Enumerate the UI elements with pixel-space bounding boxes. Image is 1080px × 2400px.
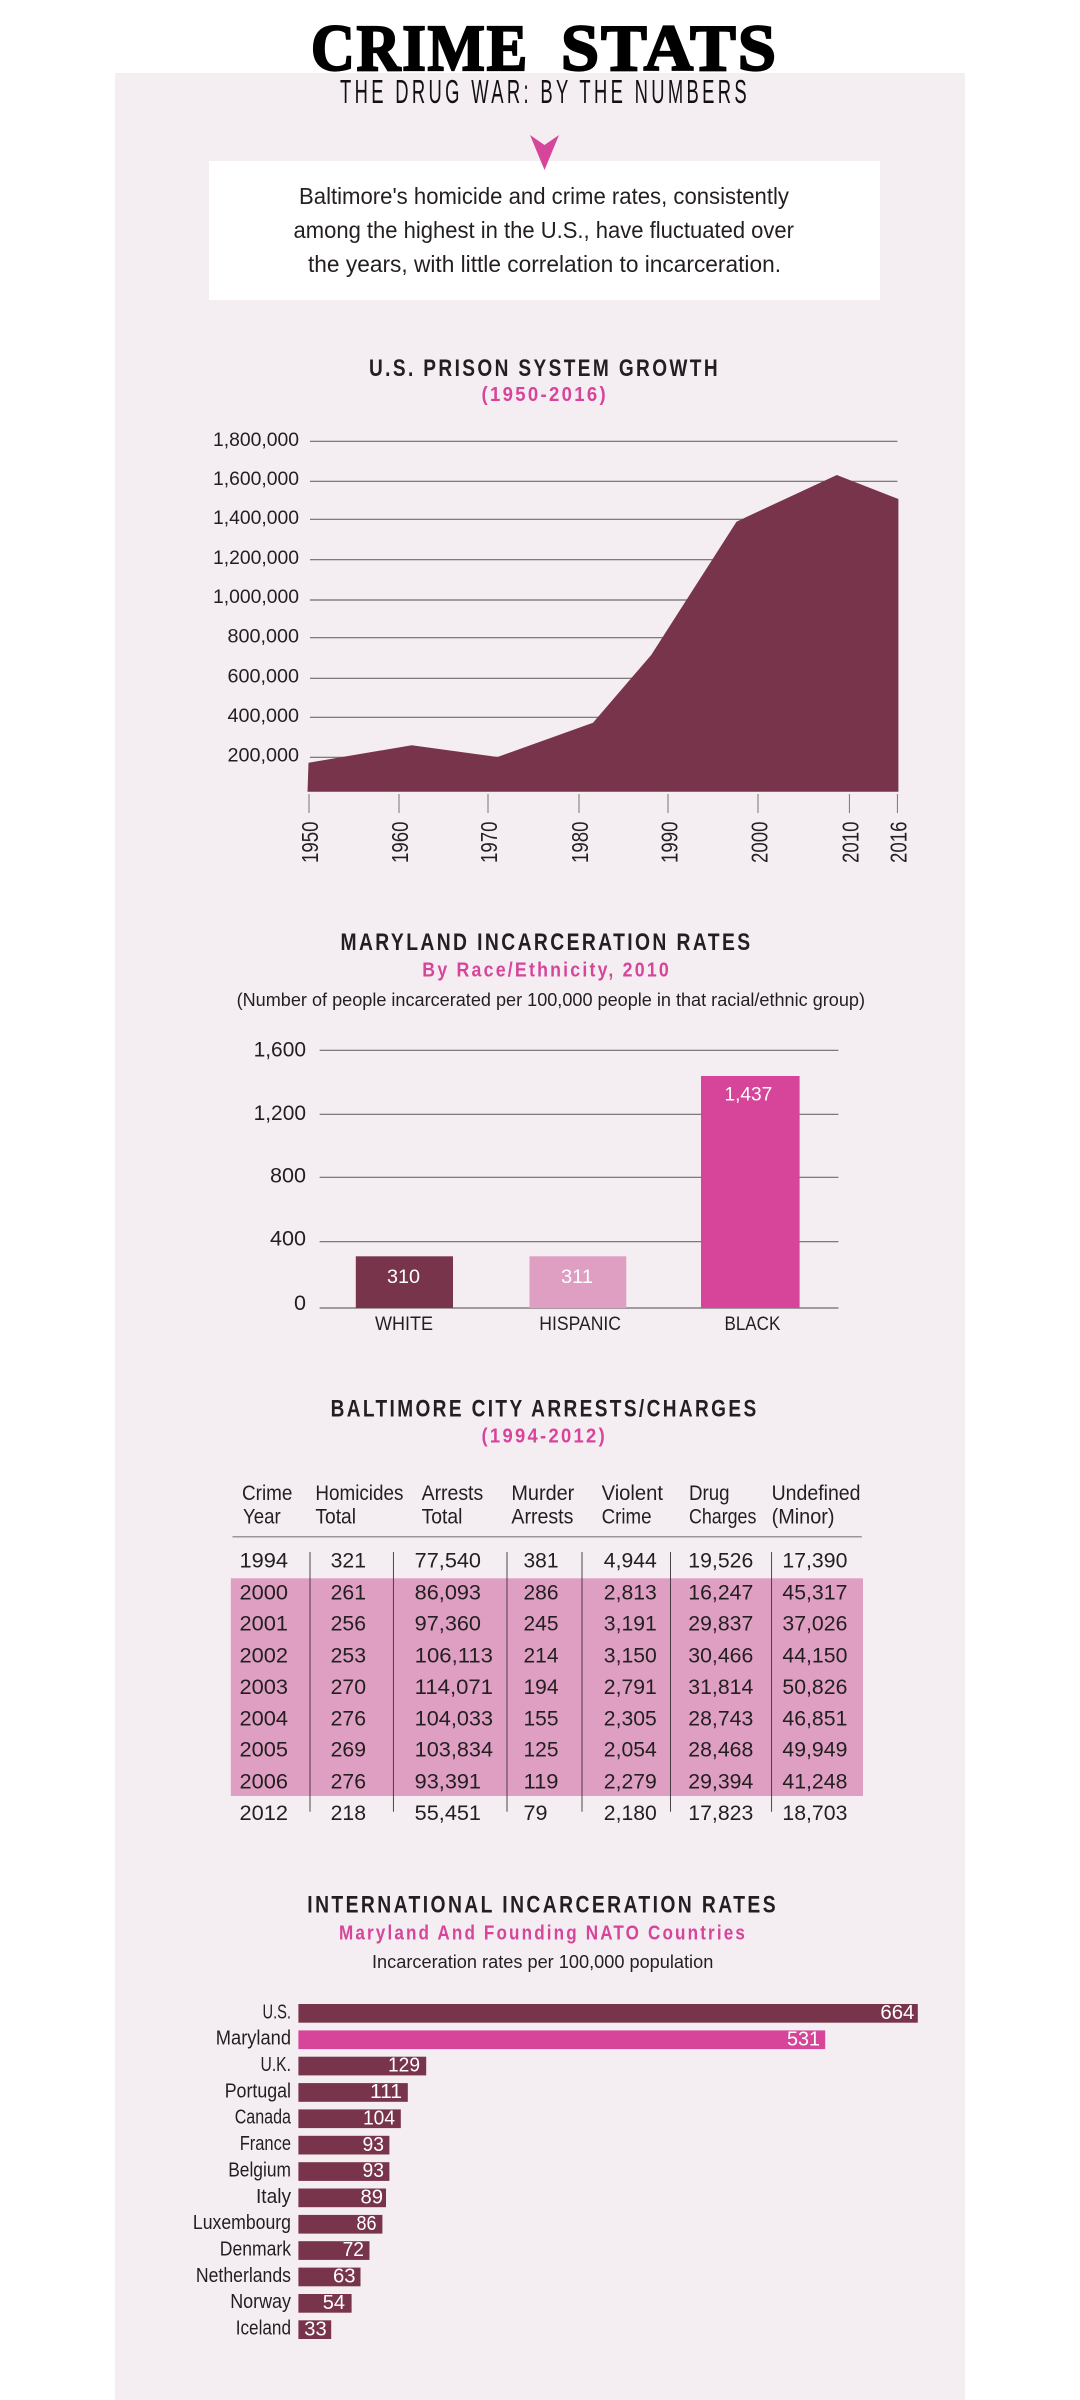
area chart: 600,000 bbox=[228, 667, 299, 688]
horizontal bar chart: 111 bbox=[370, 2080, 402, 2103]
table: 119 bbox=[524, 1769, 558, 1793]
title bbox=[311, 12, 778, 85]
horizontal bar chart: 129 bbox=[388, 2054, 420, 2077]
table: 2,180 bbox=[604, 1801, 657, 1825]
subtitle: THE DRUG WAR: BY THE NUMBERS bbox=[340, 73, 750, 110]
bar chart bbox=[254, 1038, 838, 1335]
table: 28,468 bbox=[688, 1738, 753, 1762]
table: 30,466 bbox=[688, 1644, 753, 1668]
area chart: 1,200,000 bbox=[213, 548, 299, 569]
area chart: 1,000,000 bbox=[213, 587, 299, 608]
table: 125 bbox=[524, 1738, 559, 1762]
table: 253 bbox=[331, 1644, 366, 1668]
horizontal bar chart: Belgium bbox=[228, 2159, 291, 2181]
horizontal bar chart: 72 bbox=[343, 2238, 364, 2261]
title: STATS bbox=[561, 12, 778, 85]
subheading: By Race/Ethnicity, 2010 bbox=[422, 960, 671, 982]
table: 28,743 bbox=[688, 1707, 753, 1731]
horizontal bar chart: 531 bbox=[787, 2027, 820, 2050]
title: CRIME bbox=[311, 12, 529, 85]
note: Incarceration rates per 100,000 population bbox=[372, 1951, 713, 1972]
table: 194 bbox=[524, 1675, 559, 1699]
table: Total bbox=[422, 1505, 462, 1528]
table: 2000 bbox=[240, 1580, 288, 1604]
table: Arrests bbox=[511, 1505, 573, 1528]
subheading: (1994-2012) bbox=[482, 1426, 607, 1448]
table: 3,191 bbox=[604, 1612, 657, 1636]
horizontal bar chart: France bbox=[240, 2133, 291, 2155]
table: 29,394 bbox=[688, 1769, 753, 1793]
table: Crime bbox=[242, 1482, 292, 1505]
table: Crime bbox=[602, 1505, 652, 1528]
note: (Number of people incarcerated per 100,000 people in that racial/ethnic group) bbox=[237, 989, 865, 1010]
table: 103,834 bbox=[415, 1738, 493, 1762]
table: 321 bbox=[331, 1549, 366, 1573]
horizontal bar chart: 63 bbox=[333, 2265, 356, 2288]
table: 4,944 bbox=[604, 1549, 657, 1573]
table: Undefined bbox=[772, 1482, 860, 1505]
table: 276 bbox=[331, 1769, 366, 1793]
area chart: 1980 bbox=[567, 822, 593, 863]
horizontal bar chart: Portugal bbox=[225, 2080, 291, 2102]
table: 155 bbox=[524, 1707, 559, 1731]
table: 55,451 bbox=[415, 1801, 481, 1825]
horizontal bar chart: 664 bbox=[880, 2001, 914, 2024]
table: 2,054 bbox=[604, 1738, 657, 1762]
horizontal bar chart: 54 bbox=[323, 2291, 345, 2314]
table: 214 bbox=[524, 1644, 559, 1668]
horizontal bar chart: Norway bbox=[230, 2291, 291, 2313]
bar chart: 1,600 bbox=[254, 1038, 306, 1062]
section: maryland incarceration rates bbox=[237, 929, 865, 1335]
table: 114,071 bbox=[415, 1675, 493, 1699]
panel: intro callout: Baltimore's homicide and crime rates, consistently bbox=[299, 183, 789, 209]
area chart: 1950 bbox=[297, 822, 323, 863]
table: 218 bbox=[331, 1801, 366, 1825]
table: 2012 bbox=[240, 1801, 288, 1825]
table: 3,150 bbox=[604, 1644, 657, 1668]
bar chart: HISPANIC bbox=[539, 1313, 621, 1335]
horizontal bar chart: 89 bbox=[360, 2186, 383, 2208]
table: 276 bbox=[331, 1707, 366, 1731]
table: 44,150 bbox=[782, 1644, 847, 1668]
heading: U.S. PRISON SYSTEM GROWTH bbox=[369, 355, 720, 382]
area chart: 2010 bbox=[838, 822, 864, 863]
table: 2004 bbox=[240, 1707, 288, 1731]
horizontal bar chart: Canada bbox=[235, 2107, 292, 2129]
horizontal bar chart: U.K. bbox=[260, 2054, 291, 2076]
bar chart: 800 bbox=[270, 1164, 306, 1188]
table: 2006 bbox=[240, 1769, 288, 1793]
bar chart: 1,200 bbox=[254, 1101, 306, 1125]
table: 17,390 bbox=[782, 1549, 847, 1573]
table: Violent bbox=[602, 1482, 663, 1505]
table: 50,826 bbox=[782, 1675, 847, 1699]
horizontal bar chart: 93 bbox=[362, 2159, 384, 2182]
table: 17,823 bbox=[688, 1801, 753, 1825]
table: 2,279 bbox=[604, 1769, 657, 1793]
bar chart: WHITE bbox=[375, 1313, 433, 1335]
area chart: 2016 bbox=[886, 822, 912, 863]
table: 2,305 bbox=[604, 1707, 657, 1731]
table: Total bbox=[315, 1505, 356, 1528]
area chart bbox=[213, 430, 912, 863]
table: Drug bbox=[689, 1482, 730, 1505]
heading: BALTIMORE CITY ARRESTS/CHARGES bbox=[331, 1396, 759, 1423]
bar chart: 311 bbox=[561, 1266, 593, 1288]
table bbox=[231, 1482, 863, 1825]
table: Year bbox=[243, 1505, 281, 1528]
table: 269 bbox=[331, 1738, 366, 1762]
horizontal bar chart: Luxembourg bbox=[193, 2212, 291, 2234]
horizontal bar chart: Iceland bbox=[236, 2318, 291, 2340]
table: 2002 bbox=[240, 1644, 288, 1668]
horizontal bar chart bbox=[193, 2001, 918, 2340]
table: 37,026 bbox=[782, 1612, 847, 1636]
table: 104,033 bbox=[415, 1707, 493, 1731]
horizontal bar chart: Maryland bbox=[216, 2028, 291, 2050]
panel: intro callout: the years, with little correlation to incarceration. bbox=[308, 251, 781, 277]
table: 31,814 bbox=[688, 1675, 753, 1699]
horizontal bar chart: 93 bbox=[362, 2133, 384, 2156]
table: 381 bbox=[524, 1549, 558, 1573]
table: 41,248 bbox=[782, 1769, 847, 1793]
table: 106,113 bbox=[415, 1644, 493, 1668]
table: 256 bbox=[331, 1612, 366, 1636]
table: 1994 bbox=[240, 1549, 288, 1573]
table: 79 bbox=[524, 1801, 548, 1825]
area chart: 1970 bbox=[476, 822, 502, 863]
table: 18,703 bbox=[782, 1801, 847, 1825]
table: (Minor) bbox=[772, 1505, 834, 1528]
bar chart: 310 bbox=[387, 1266, 420, 1288]
area chart: 1,600,000 bbox=[213, 469, 299, 490]
panel: background bbox=[115, 73, 965, 2400]
heading: INTERNATIONAL INCARCERATION RATES bbox=[307, 1892, 778, 1919]
table: 2,791 bbox=[604, 1675, 657, 1699]
bar chart: 0 bbox=[294, 1291, 306, 1315]
table: 286 bbox=[524, 1580, 559, 1604]
table: 86,093 bbox=[415, 1580, 481, 1604]
panel: intro callout: among the highest in the U.S., have fluctuated over bbox=[294, 217, 794, 243]
table: Homicides bbox=[315, 1482, 403, 1505]
horizontal bar chart: Italy bbox=[256, 2186, 291, 2208]
table: 97,360 bbox=[415, 1612, 481, 1636]
table: 29,837 bbox=[688, 1612, 753, 1636]
horizontal bar chart: 33 bbox=[304, 2317, 327, 2340]
table: 19,526 bbox=[688, 1549, 753, 1573]
table: 77,540 bbox=[415, 1549, 481, 1573]
area chart: 800,000 bbox=[228, 627, 299, 648]
section: baltimore city arrests and charges bbox=[231, 1396, 863, 1825]
table: 45,317 bbox=[782, 1580, 847, 1604]
table: 16,247 bbox=[688, 1580, 753, 1604]
table: 2,813 bbox=[604, 1580, 657, 1604]
area chart: 1990 bbox=[656, 822, 682, 863]
table: 2005 bbox=[240, 1738, 288, 1762]
bar chart: 400 bbox=[270, 1226, 306, 1250]
horizontal bar chart: Netherlands bbox=[196, 2265, 291, 2287]
table: 2001 bbox=[240, 1612, 288, 1636]
section: prison system growth bbox=[213, 355, 912, 863]
icon: down arrow bbox=[530, 135, 559, 170]
bar chart: 1,437 bbox=[724, 1084, 772, 1106]
subheading: Maryland And Founding NATO Countries bbox=[339, 1922, 747, 1944]
table: Murder bbox=[511, 1482, 574, 1505]
horizontal bar chart: Denmark bbox=[220, 2238, 292, 2260]
bar chart: BLACK bbox=[724, 1313, 780, 1335]
horizontal bar chart: 104 bbox=[363, 2106, 395, 2129]
subheading: (1950-2016) bbox=[482, 384, 608, 406]
table: 2003 bbox=[240, 1675, 288, 1699]
table: 261 bbox=[331, 1580, 366, 1604]
area chart: 2000 bbox=[746, 822, 772, 863]
area chart: 400,000 bbox=[228, 706, 299, 727]
panel: intro callout bbox=[209, 161, 880, 300]
table: 49,949 bbox=[782, 1738, 847, 1762]
section: international incarceration rates bbox=[193, 1892, 918, 2340]
table: Charges bbox=[689, 1505, 756, 1528]
horizontal bar chart: 86 bbox=[356, 2212, 376, 2235]
table: 93,391 bbox=[415, 1769, 481, 1793]
table: Arrests bbox=[422, 1482, 483, 1505]
area chart: 1960 bbox=[387, 822, 413, 863]
table: 270 bbox=[331, 1675, 366, 1699]
heading: MARYLAND INCARCERATION RATES bbox=[340, 929, 752, 956]
area chart: 200,000 bbox=[228, 746, 299, 767]
horizontal bar chart: U.S. bbox=[262, 2001, 291, 2023]
area chart: 1,400,000 bbox=[213, 508, 299, 529]
area chart: 1,800,000 bbox=[213, 430, 299, 451]
table: 245 bbox=[524, 1612, 559, 1636]
table: 46,851 bbox=[782, 1707, 847, 1731]
